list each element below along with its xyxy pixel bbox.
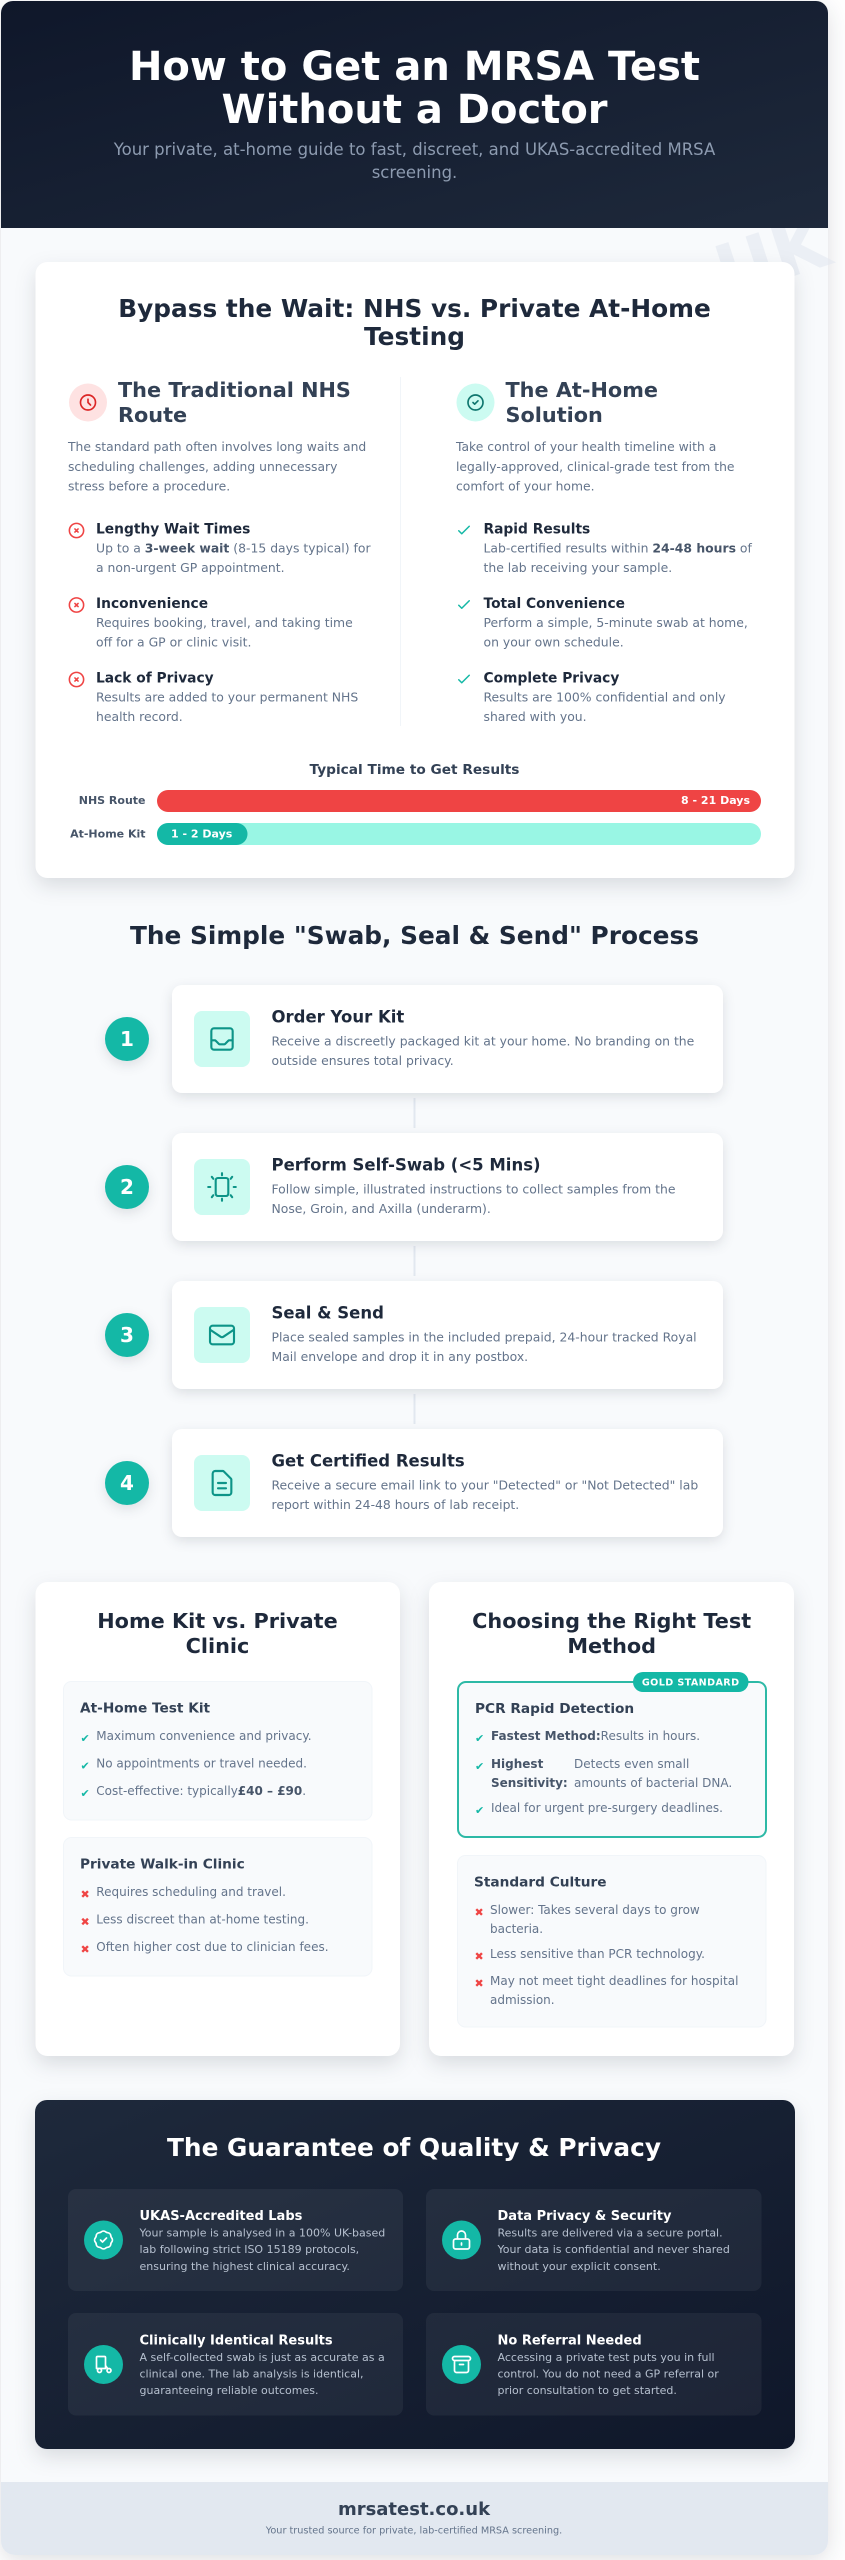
step 3 [105,1281,723,1389]
intro text: stress before a procedure. [68,480,230,494]
card: no referral needed [426,2313,762,2416]
box: standard culture: Standard Culture [474,1874,607,1890]
icon: sample cart [84,2345,123,2384]
title: How to Get an MRSA Test [129,44,700,90]
panel heading: Home Kit vs. Private [97,1609,338,1633]
item: rapid results: the lab receiving your sample. [484,560,672,575]
heading: Testing [364,322,465,351]
item: lack of privacy: Results are added to your permanent NHS [96,690,358,704]
icon: badge check [84,2220,123,2260]
box: at-home test kit: ✔ [80,1760,90,1772]
card: UKAS-accredited labs: UKAS-Accredited Labs [140,2209,303,2224]
step 1: outside ensures total privacy. [272,1053,454,1068]
step 4: Receive a secure email link to your "Detected" or "Not Detected" lab [272,1478,698,1492]
intro text: Take control of your health timeline with a [455,440,716,454]
step 4: Get Certified Results [272,1452,465,1470]
card: clinically identical results: guaranteeing reliable outcomes. [140,2384,318,2397]
step 2: Nose, Groin, and Axilla (underarm). [272,1201,491,1216]
icon: envelope [194,1307,250,1363]
box: private walk-in clinic [64,1838,372,1976]
box: standard culture: admission. [490,1993,555,2007]
box: PCR rapid detection: amounts of bacterial DNA. [574,1776,732,1790]
intro text: scheduling challenges, adding unnecessary [68,460,337,474]
panel: choosing the right test method [429,1582,794,2056]
item: complete privacy: Complete Privacy [484,670,619,686]
bar: NHS route [79,790,761,812]
item: inconvenience [69,596,353,650]
card: no referral needed: No Referral Needed [498,2334,642,2348]
heading: process: The Simple "Swab, Seal & Send" Process [130,921,699,950]
panel heading: Choosing the Right Test [472,1609,751,1633]
box: private walk-in clinic: Often higher cost due to clinician fees. [96,1940,329,1954]
step 2: Perform Self-Swab (<5 Mins) [272,1156,541,1174]
box: PCR rapid detection [458,1672,766,1837]
box: standard culture: Slower: Takes several days to grow [490,1903,700,1917]
panel heading: Clinic [186,1634,249,1658]
box: standard culture [458,1856,766,2027]
subtitle: Your private, at-home guide to fast, discreet, and UKAS-accredited MRSA [113,140,716,159]
column: traditional NHS route [67,378,371,724]
card: clinically identical results: A self-collected swab is just as accurate as a [140,2351,385,2364]
step 4: report within 24-48 hours of lab receipt. [272,1497,519,1512]
watermark: MRSATEST.CO.UK [149,199,841,495]
column heading: Solution [506,403,603,427]
item: inconvenience: off for a GP or clinic visit. [96,634,251,650]
site name: mrsatest.co.uk [338,2499,491,2520]
box: standard culture: ✖ [474,1950,484,1963]
card: clinically identical results: clinical one. The lab analysis is identical, [140,2368,364,2380]
bar: at-home kit [70,823,761,845]
step 2 [105,1133,723,1241]
bar: NHS route: NHS Route [79,794,146,807]
subtitle: screening. [372,163,457,182]
box: PCR rapid detection: PCR Rapid Detection [475,1701,634,1717]
step 1 [105,985,723,1093]
panel heading: Method [567,1634,656,1658]
item: total convenience: Total Convenience [484,596,625,612]
item: complete privacy: shared with you. [484,709,587,724]
item: total convenience: on your own schedule. [484,634,624,650]
box: at-home test kit: Maximum convenience and privacy. [96,1729,312,1743]
card: clinically identical results [68,2313,403,2416]
step 2: 2 [120,1175,134,1199]
box: private walk-in clinic: Private Walk-in Clinic [80,1856,245,1872]
intro text: The standard path often involves long waits and [67,440,366,454]
step 1: Order Your Kit [272,1008,404,1026]
item: lack of privacy: Lack of Privacy [96,670,214,686]
title: Without a Doctor [221,87,608,133]
box: standard culture: Less sensitive than PCR technology. [490,1947,705,1961]
box: at-home test kit: ✔ [80,1787,90,1800]
step 3: Seal & Send [272,1304,384,1322]
box: at-home test kit: ✔ [80,1732,90,1745]
header [1,1,828,228]
bar: at-home kit: 1 - 2 Days [171,828,233,840]
column: at-home solution [455,378,752,724]
icon: swab light [194,1159,250,1215]
tagline: Your trusted source for private, lab-certified MRSA screening. [265,2526,562,2536]
heading: Bypass the Wait: NHS vs. Private At-Home [118,294,711,323]
box: PCR rapid detection: Fastest Method:Results in hours. [491,1729,700,1743]
item: lengthy wait times [69,522,371,575]
step 3: Place sealed samples in the included prepaid, 24-hour tracked Royal [272,1330,697,1344]
card: data privacy and security: Data Privacy & Security [498,2209,672,2224]
panel: guarantee of quality and privacy [35,2100,795,2449]
step 4 [105,1429,723,1537]
icon: check circle [456,384,494,422]
box: PCR rapid detection: Detects even small [574,1757,689,1771]
card: no referral needed: prior consultation to get started. [498,2384,677,2397]
item: inconvenience: Requires booking, travel, and taking time [96,615,353,630]
panel: NHS vs private comparison [36,262,794,878]
box: PCR rapid detection: Sensitivity: [491,1776,568,1790]
box: standard culture: ✖ [474,1906,484,1919]
card: UKAS-accredited labs: ensuring the highest clinical accuracy. [140,2260,350,2273]
card: data privacy and security: Your data is confidential and never shared [496,2243,730,2256]
card: UKAS-accredited labs [68,2189,403,2291]
item: rapid results: Rapid Results [484,522,590,538]
item: total convenience: Perform a simple, 5-minute swab at home, [484,615,748,630]
card: no referral needed: control. You do not need a GP referral or [498,2368,719,2380]
card: data privacy and security: Results are delivered via a secure portal. [498,2226,723,2240]
item: lengthy wait times: 3-week wait (8-15 days typical) for [145,540,371,556]
card: data privacy and security: without your explicit consent. [498,2260,661,2273]
chart title: Typical Time to Get Results [310,762,519,778]
card: UKAS-accredited labs: lab following strict ISO 15189 protocols, [140,2243,359,2256]
box: at-home test kit: At-Home Test Kit [80,1700,211,1716]
badge: gold standard [633,1672,748,1692]
step 1: Receive a discreetly packaged kit at your home. No branding on the [272,1034,694,1048]
item: complete privacy [459,670,726,724]
item: inconvenience: Inconvenience [96,596,208,612]
column heading: The Traditional NHS [118,378,351,402]
box: PCR rapid detection: ✔ [475,1732,484,1745]
card: data privacy and security [426,2189,762,2291]
step 3: 3 [120,1323,134,1347]
icon: archive box [442,2345,481,2384]
box: private walk-in clinic: Less discreet than at-home testing. [96,1912,309,1926]
connectors [414,1098,416,1424]
box: at-home test kit: Cost-effective: typically£40 – £90. [96,1784,306,1798]
item: lengthy wait times: Lengthy Wait Times [96,522,250,538]
footer [1,2482,828,2555]
step 2: Follow simple, illustrated instructions to collect samples from the [272,1182,675,1196]
box: PCR rapid detection: Ideal for urgent pre-surgery deadlines. [491,1801,723,1815]
box: private walk-in clinic: ✖ [80,1943,90,1956]
card: clinically identical results: Clinically Identical Results [140,2334,333,2348]
icon: clock [69,384,107,422]
box: PCR rapid detection: ✔ [475,1760,484,1773]
badge: gold standard: GOLD STANDARD [642,1678,739,1688]
card: UKAS-accredited labs: Your sample is analysed in a 100% UK-based [138,2226,385,2240]
box: at-home test kit: No appointments or travel needed. [96,1756,307,1770]
item: lack of privacy [69,670,358,724]
step 3: Mail envelope and drop it in any postbox. [272,1349,528,1364]
item: lack of privacy: health record. [96,709,183,724]
box: PCR rapid detection: ✔ [475,1804,484,1817]
item: rapid results [459,522,752,575]
panel: home kit vs private clinic [36,1582,400,2056]
panel heading: The Guarantee of Quality & Privacy [167,2133,661,2162]
intro text: comfort of your home. [456,480,595,494]
item: complete privacy: Results are 100% confidential and only [484,690,726,704]
item: rapid results: 24-48 hours of [652,540,752,556]
box: PCR rapid detection: Highest [491,1757,544,1771]
card: no referral needed: Accessing a private test puts you in full [498,2351,715,2364]
box: standard culture: May not meet tight deadlines for hospital [490,1974,738,1988]
box: standard culture: bacteria. [490,1922,543,1936]
item: rapid results: Lab-certified results within [484,540,652,556]
item: total convenience [459,596,748,650]
column heading: Route [118,403,187,427]
bar chart: typical time to results [70,762,761,845]
item: lengthy wait times: a non-urgent GP appointment. [96,560,285,575]
box: at-home test kit [64,1682,372,1820]
box: private walk-in clinic: ✖ [80,1916,90,1928]
box: standard culture: ✖ [474,1977,484,1990]
box: private walk-in clinic: ✖ [80,1888,90,1901]
box: private walk-in clinic: Requires scheduling and travel. [96,1885,286,1899]
column heading: The At-Home [506,378,658,402]
icon: lock [442,2220,481,2260]
step 4: 4 [120,1471,134,1495]
bar: NHS route: 8 - 21 Days [681,794,750,807]
icon: document [194,1455,250,1511]
intro text: legally-approved, clinical-grade test from the [456,460,734,474]
bar: at-home kit: At-Home Kit [70,828,146,840]
step 1: 1 [120,1027,134,1051]
icon: inbox [194,1011,250,1067]
item: lengthy wait times: Up to a [96,540,145,556]
